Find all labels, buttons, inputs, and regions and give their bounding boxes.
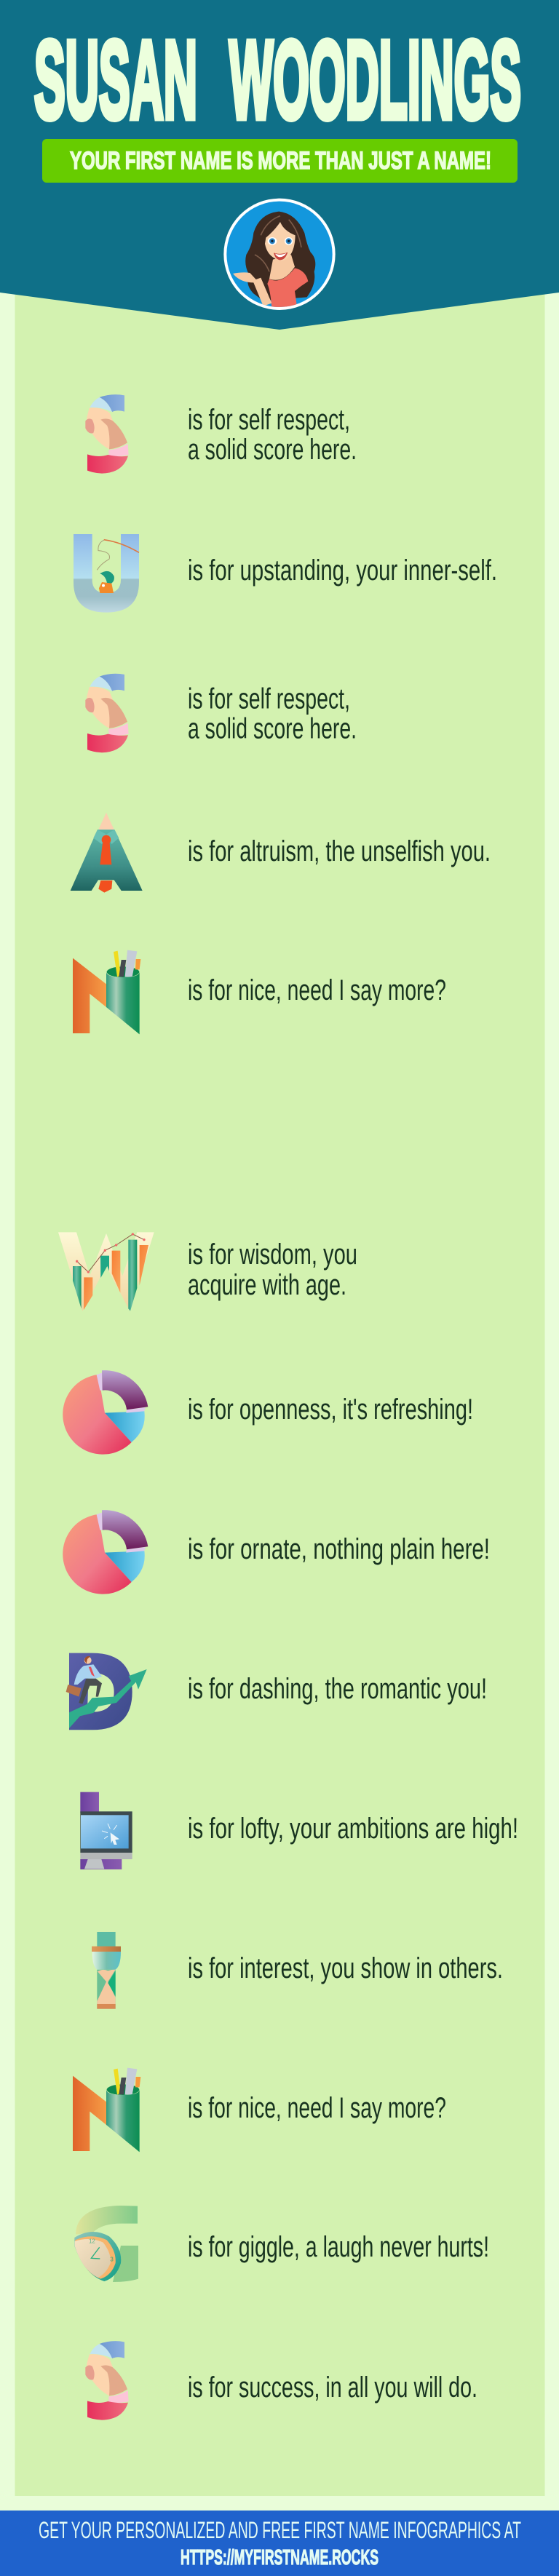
row 13: letter G clock icon <box>74 2206 138 2282</box>
row 6: text <box>188 1239 357 1301</box>
row 1: text <box>188 404 357 466</box>
tagline bar <box>42 139 518 183</box>
row 12: letter N icon <box>73 2068 140 2152</box>
row 3: letter S icon <box>85 674 129 752</box>
footer <box>0 2511 559 2576</box>
row 1: letter S icon <box>85 394 129 474</box>
row 9: letter D icon <box>66 1653 147 1730</box>
row 10: letter L monitor icon <box>80 1792 132 1869</box>
avatar: woman in circle <box>223 199 336 310</box>
title: SUSAN <box>34 18 197 142</box>
row 3: text: is for self respect, <box>188 683 350 715</box>
header banner <box>0 0 559 330</box>
row 4: letter A icon <box>71 813 143 893</box>
row 5: letter N icon <box>73 950 140 1034</box>
row 1: text: is for self respect, <box>188 404 350 436</box>
row 8: letter O pie icon <box>63 1510 148 1594</box>
row 6: letter W icon <box>58 1232 154 1311</box>
row 3: text <box>188 683 357 745</box>
row 11: letter I hourglass icon <box>92 1932 121 2009</box>
row 12: text: is for nice, need I say more? <box>188 2092 446 2124</box>
footer: HTTPS://MYFIRSTNAME.ROCKS <box>181 2546 378 2569</box>
row 13: letter G clock icon: 12 <box>89 2238 95 2245</box>
row 5: text: is for nice, need I say more? <box>188 974 446 1006</box>
row 2: letter U icon <box>74 534 139 613</box>
row 1: text: a solid score here. <box>188 434 357 466</box>
row 6: text: is for wisdom, you <box>188 1239 357 1271</box>
row 6: text: acquire with age. <box>188 1269 346 1301</box>
row 7: letter O pie icon <box>63 1370 148 1455</box>
row 13: letter G clock icon: 3 <box>110 2256 114 2262</box>
row 14: letter S icon <box>85 2341 129 2420</box>
row 3: text: a solid score here. <box>188 713 357 745</box>
